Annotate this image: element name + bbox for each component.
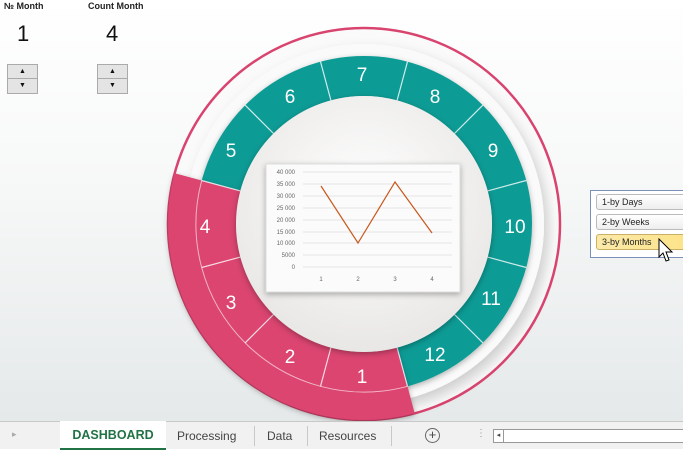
scrollbar — [493, 429, 683, 443]
label: count month: Count Month — [88, 1, 143, 11]
tab: dashboard — [60, 421, 166, 450]
month numbers: 4 — [200, 217, 211, 238]
month numbers: 12 — [424, 345, 446, 366]
spinner 1: ▲ — [19, 68, 26, 75]
center disc — [236, 96, 492, 352]
segment dividers — [202, 62, 526, 386]
option: months — [596, 234, 683, 250]
option: weeks — [596, 214, 683, 230]
month numbers: 7 — [357, 65, 367, 86]
line chart: 5000 — [282, 253, 296, 259]
line chart — [266, 164, 460, 292]
line chart: 1 — [319, 277, 323, 283]
sheet tabs bar: ⋮ — [476, 428, 486, 439]
option: months: 3-by Months — [602, 237, 652, 247]
spinner 2 — [97, 64, 128, 94]
tab: data: Data — [267, 429, 292, 443]
month numbers: 9 — [488, 141, 498, 162]
option: days: 1-by Days — [602, 197, 643, 207]
line chart: 0 — [292, 265, 296, 271]
tab: processing: Processing — [177, 429, 236, 443]
pink sector — [168, 173, 415, 420]
line chart: 2 — [356, 277, 360, 283]
add sheet icon — [425, 428, 440, 443]
month numbers: 6 — [285, 87, 295, 108]
month numbers: 5 — [226, 141, 236, 162]
cursor — [658, 238, 674, 262]
sheet tabs bar: ▸ — [12, 429, 17, 439]
month numbers: 3 — [226, 293, 236, 314]
line chart: 35 000 — [277, 182, 296, 188]
month numbers: 8 — [430, 87, 440, 108]
spinner 2: ▲ — [109, 68, 116, 75]
value: count month: 4 — [106, 21, 118, 46]
outer ring — [168, 28, 560, 420]
month numbers: 2 — [285, 347, 295, 368]
option: weeks: 2-by Weeks — [602, 217, 649, 227]
spinner 2: ▼ — [109, 82, 116, 89]
line chart: 25 000 — [277, 206, 296, 212]
month numbers: 11 — [481, 289, 501, 310]
line chart: 30 000 — [277, 194, 296, 200]
add sheet icon: + — [429, 427, 436, 442]
line chart: 10 000 — [277, 241, 296, 247]
month numbers: 10 — [504, 217, 526, 238]
label: month number: № Month — [4, 1, 44, 11]
month numbers — [200, 65, 526, 388]
spinner 1: ▼ — [19, 82, 26, 89]
tab: dashboard: DASHBOARD — [72, 428, 154, 442]
value: month number: 1 — [17, 21, 29, 46]
line chart: 40 000 — [277, 170, 296, 176]
teal ring — [216, 76, 512, 372]
line chart: 15 000 — [277, 230, 296, 236]
option: days — [596, 194, 683, 210]
tab: resources: Resources — [319, 429, 376, 443]
scrollbar: ◂ — [497, 432, 500, 439]
sheet tabs bar — [0, 421, 683, 449]
line chart: 3 — [393, 277, 397, 283]
spinner 1 — [7, 64, 38, 94]
line chart: 4 — [430, 277, 434, 283]
line chart: 20 000 — [277, 218, 296, 224]
option panel — [590, 190, 683, 258]
month numbers: 1 — [357, 367, 367, 388]
